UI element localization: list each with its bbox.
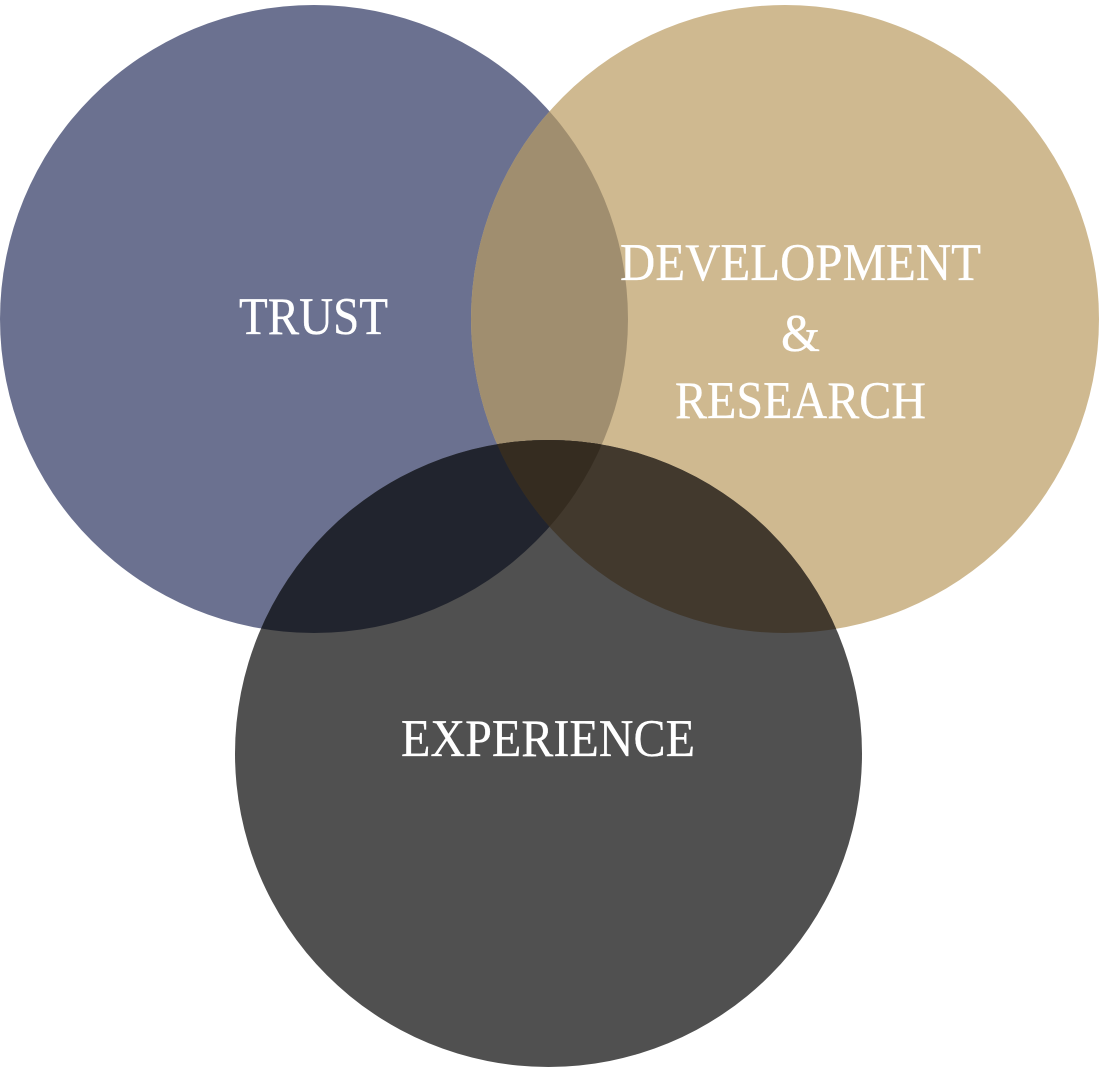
overlap: all three: [497, 440, 602, 526]
label: experience: EXPERIENCE: [401, 710, 695, 768]
circle: development and research: [471, 5, 1099, 633]
label: development and research: &: [781, 305, 820, 363]
overlap: development and experience: [499, 440, 836, 633]
label: development and research: DEVELOPMENT: [620, 234, 981, 292]
overlap: trust and development: [471, 112, 628, 444]
circle: experience: [235, 440, 862, 1067]
circle: trust: [0, 5, 628, 633]
label: development and research: [620, 234, 981, 430]
label: trust: TRUST: [239, 288, 388, 346]
overlap: trust and experience: [261, 440, 601, 633]
label: development and research: RESEARCH: [675, 372, 926, 430]
